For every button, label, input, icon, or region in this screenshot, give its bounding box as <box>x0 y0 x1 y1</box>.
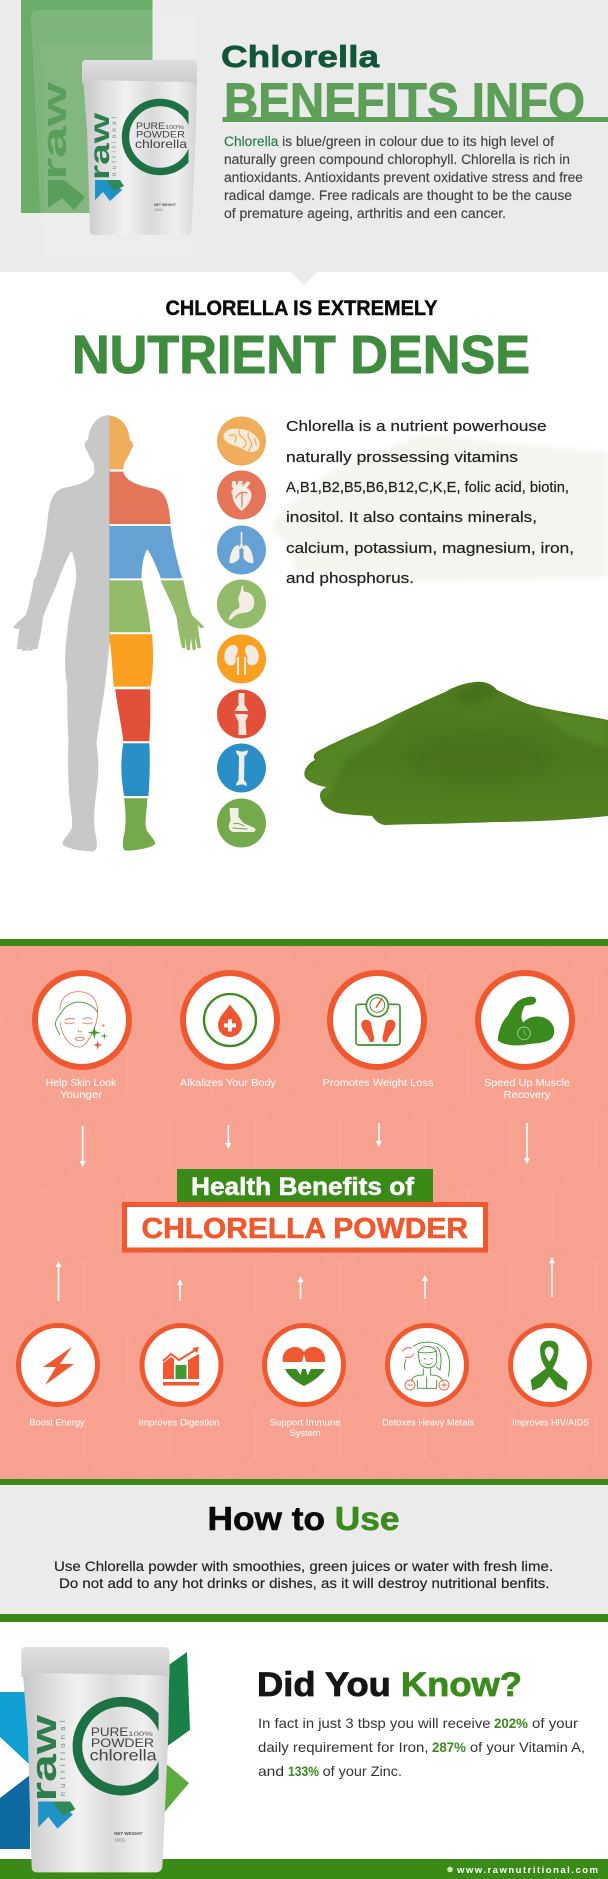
text block: nutrient powerhouse <box>286 418 574 587</box>
body: arm segment <box>161 580 204 650</box>
label: Help Skin Look <box>46 1077 117 1089</box>
pouch: product: 150G <box>154 208 163 212</box>
label: Improves Digestion <box>138 1418 220 1428</box>
icon: flexed arm <box>498 997 554 1045</box>
pouch: product: nutritional <box>112 117 118 176</box>
pouch: product: NET WEIGHT <box>154 203 177 207</box>
footer bar: www.rawnutritional.com <box>456 1865 598 1876</box>
label <box>270 1418 340 1439</box>
panel: header <box>0 0 608 285</box>
benefit: digestion <box>138 1326 221 1428</box>
pouch: product: chlorella <box>135 137 187 151</box>
ghost pouch: raw <box>35 81 73 180</box>
pouch: product lower: nutritional <box>58 1720 67 1796</box>
text block: intro: Chlorella is blue/green in colour due to its high level of <box>224 134 554 149</box>
label: Younger <box>60 1089 103 1101</box>
text block: nutrient powerhouse: calcium, potassium, magnesium, iron, <box>286 540 574 557</box>
text block: intro: antioxidants. Antioxidants prevent oxidative stress and free <box>224 170 583 185</box>
body: shoulder segment <box>109 472 171 524</box>
body: foot segment <box>123 798 155 851</box>
banner: chlorella powder <box>124 1204 486 1250</box>
label: Alkalizes Your Body <box>180 1077 277 1089</box>
icon: stomach <box>217 580 266 628</box>
icon: detox person <box>403 1342 450 1390</box>
label <box>484 1077 570 1101</box>
icon: lightning bolt <box>43 1347 74 1385</box>
pouch: product lower: POWDER <box>91 1736 154 1750</box>
text block: usage <box>54 1558 553 1591</box>
body: chest segment <box>109 526 182 578</box>
icon: bone <box>217 744 266 792</box>
pointer triangle <box>291 272 317 285</box>
benefit: muscle <box>478 973 572 1101</box>
pouch: product: 100% <box>165 125 185 131</box>
pouch: product: POWDER <box>136 130 185 140</box>
benefit: alkalizes <box>180 973 277 1089</box>
icon: heartbeat <box>283 1347 325 1386</box>
title: Benefits Info: BENEFITS INFO <box>224 73 585 129</box>
body: abdomen segment <box>109 580 150 632</box>
icon: rising chart <box>163 1347 199 1386</box>
body: head segment <box>109 416 133 469</box>
pouch: product <box>82 60 197 235</box>
banner: health benefits of <box>177 1169 433 1203</box>
text block: usage: Do not add to any hot drinks or dishes, as it will destroy nutritional benfits. <box>59 1575 550 1591</box>
label: Speed Up Muscle <box>484 1077 570 1089</box>
label: Detoxes Heavy Metals <box>382 1418 474 1428</box>
banner: health benefits of: Health Benefits of <box>191 1173 415 1201</box>
heading: did you know: Did You Know? <box>257 1666 522 1704</box>
body: gray half <box>14 416 109 851</box>
panel: how to use <box>0 1479 608 1622</box>
text block: did you know facts: of your <box>532 1715 578 1731</box>
text block: intro: of premature ageing, arthritis and een cancer. <box>224 206 506 221</box>
heading: chlorella is extremely: CHLORELLA IS EXTREMELY <box>166 297 438 320</box>
heading: how to use: How to Use <box>208 1500 400 1537</box>
label: Support Immune <box>270 1418 340 1428</box>
icon: lungs <box>217 526 266 574</box>
icon: ribbon <box>531 1341 568 1391</box>
body: hip segment <box>109 634 153 687</box>
icon: blood drop <box>204 994 256 1046</box>
ghost pouch <box>31 10 194 257</box>
pouch: product: PURE <box>136 121 165 132</box>
text block: nutrient powerhouse: Chlorella is a nutrient powerhouse <box>286 418 547 435</box>
benefit: detox <box>382 1326 474 1428</box>
body: shin segment <box>121 743 150 796</box>
text block: nutrient powerhouse: inositol. It also contains minerals, <box>286 509 537 526</box>
label: Promotes Weight Loss <box>322 1077 434 1089</box>
text block: intro: radical damge. Free radicals are thought to be the cause <box>224 188 572 203</box>
label: Boost Energy <box>30 1418 85 1428</box>
label: Improves HIV/AIDS <box>512 1418 589 1428</box>
benefit: hiv <box>510 1326 590 1428</box>
powder smear background <box>271 433 608 582</box>
text block: did you know facts: of your Zinc. <box>323 1763 402 1779</box>
pouch: product lower: chlorella <box>90 1747 157 1764</box>
pouch: product lower: 150G <box>114 1837 126 1842</box>
icon: scale <box>356 995 400 1045</box>
label: System <box>290 1428 321 1439</box>
pouch: product lower: raw <box>24 1714 64 1802</box>
text block: intro <box>224 134 583 221</box>
benefit: energy <box>18 1326 98 1428</box>
text block: nutrient powerhouse: naturally prossessing vitamins <box>286 449 518 466</box>
footer bar <box>0 1859 608 1879</box>
text block: usage: Use Chlorella powder with smoothies, green juices or water with fresh lime. <box>54 1558 553 1574</box>
pouch: product lower <box>21 1647 170 1872</box>
logo shapes behind pouch <box>0 1652 190 1849</box>
text block: intro: naturally green compound chlorophyll. Chlorella is rich in <box>224 152 570 167</box>
text block: nutrient powerhouse: A,B1,B2,B5,B6,B12,C,K,E, folic acid, biotin, <box>286 479 569 496</box>
pouch: product lower: PURE <box>91 1725 128 1739</box>
text block: did you know facts: In fact in just 3 tbsp you will receive <box>258 1715 491 1731</box>
icon: brain <box>217 416 266 466</box>
pouch: product lower: 100% <box>128 1731 153 1738</box>
icon: joint <box>217 690 266 738</box>
heading: nutrient dense: NUTRIENT DENSE <box>72 325 530 385</box>
text block: nutrient powerhouse: and phosphorus. <box>286 570 414 587</box>
pouch: product: raw <box>84 112 116 180</box>
arrows: down <box>80 1123 530 1167</box>
text block: did you know facts: 202% <box>494 1715 529 1731</box>
benefit: immune <box>264 1326 344 1439</box>
title: Chlorella: Chlorella <box>221 39 380 74</box>
icon: face <box>55 992 108 1050</box>
arrows: up <box>56 1257 555 1301</box>
text block: did you know facts: of your Vitamin A, <box>470 1739 585 1755</box>
text block: did you know facts: daily requirement for Iron, <box>258 1739 428 1755</box>
green backdrop rectangle <box>21 0 152 213</box>
panel: health benefits <box>0 939 608 1479</box>
benefit: skin <box>35 973 129 1101</box>
banner: chlorella powder: CHLORELLA POWDER <box>142 1213 468 1245</box>
label: Recovery <box>504 1089 551 1101</box>
green top strip <box>0 939 608 946</box>
salmon background <box>0 946 608 1479</box>
benefit: weight <box>322 973 434 1089</box>
icon: foot <box>217 798 266 848</box>
text block: did you know facts: 133% <box>288 1763 319 1779</box>
label <box>46 1077 117 1101</box>
text block: did you know facts <box>258 1715 585 1779</box>
text block: did you know facts: and <box>258 1763 284 1779</box>
text block: did you know facts: 287% <box>432 1739 467 1755</box>
body: thigh segment <box>115 689 150 741</box>
icon: heart <box>217 470 266 520</box>
chart: body map <box>14 416 204 851</box>
illustration: powder pile <box>304 682 608 825</box>
pouch: product lower: NET WEIGHT <box>114 1831 143 1836</box>
icon: kidneys <box>217 634 266 684</box>
